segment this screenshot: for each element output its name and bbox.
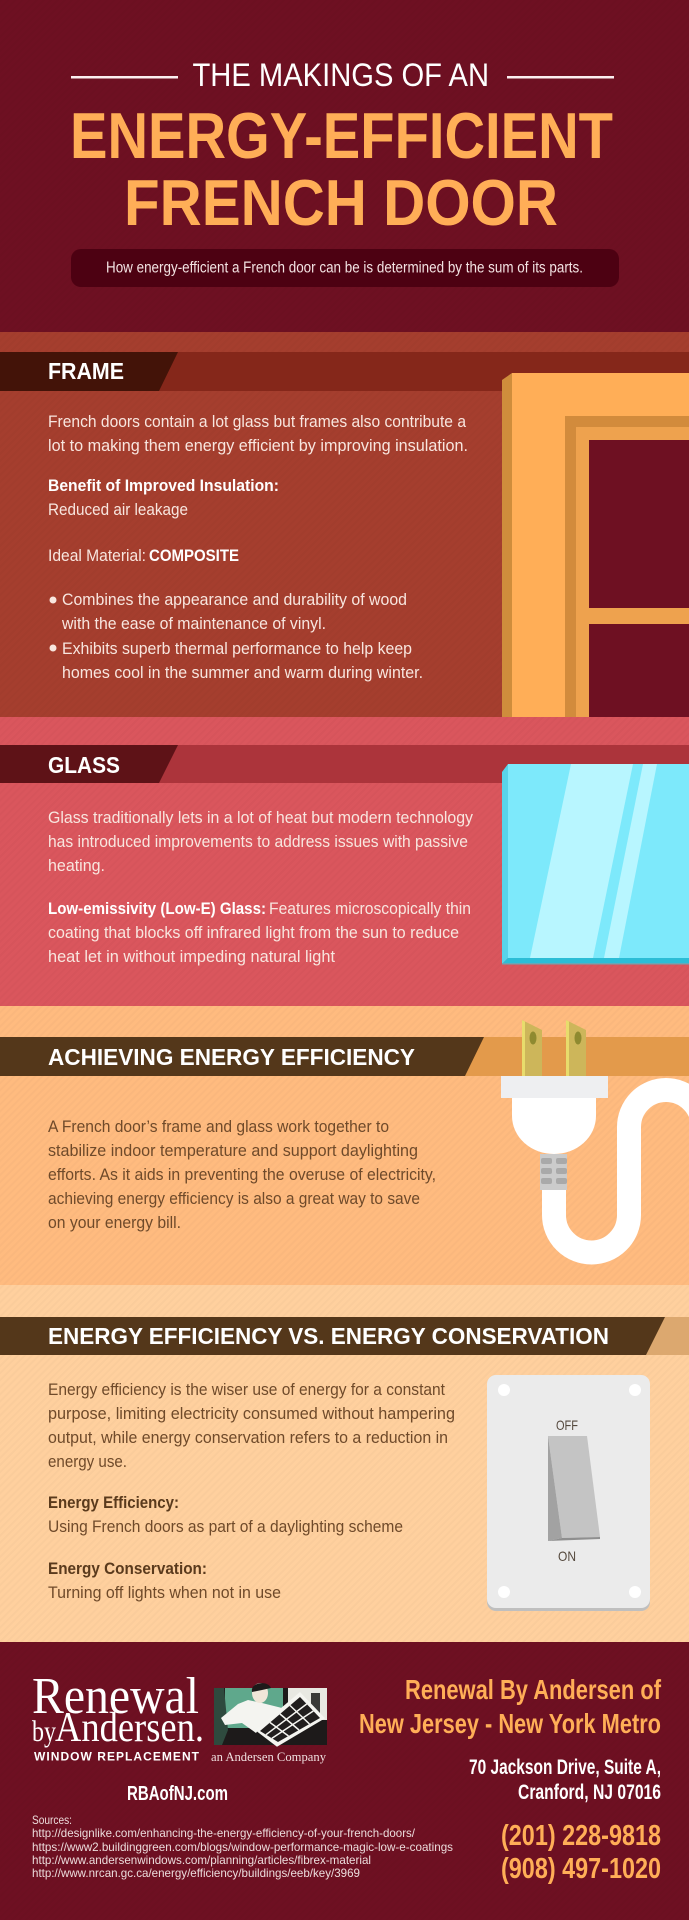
text block: achieving body: on your energy bill. [48,1214,181,1232]
heading: efficiency vs conservation: ENERGY EFFICIENCY VS. ENERGY CONSERVATION [48,1323,609,1349]
text block: low-e glass: Features microscopically thin [269,900,471,918]
text block: energy conservation example: Turning off lights when not in use [48,1584,281,1602]
heading: glass: GLASS [48,752,120,778]
text block: ideal material [48,547,239,565]
logo: renewal by andersen: WINDOW REPLACEMENT [34,1750,200,1764]
text block: frame intro [48,413,468,455]
address [469,1756,661,1804]
text block: definition: output, while energy conservation refers to a reduction in [48,1429,448,1447]
title: french door: FRENCH DOOR [124,166,558,239]
heading: achieving energy efficiency: ACHIEVING ENERGY EFFICIENCY [48,1044,415,1070]
logo: renewal by andersen: Renewal [32,1668,199,1725]
heading: frame [0,352,178,391]
text block: energy efficiency example: Energy Efficiency: [48,1494,179,1512]
heading: efficiency vs conservation [0,1317,665,1355]
icon: plug [501,1020,689,1252]
text block: definition: purpose, limiting electricity consumed without hampering [48,1405,455,1423]
text block: ideal material: COMPOSITE [149,547,239,565]
logo: renewal by andersen: Andersen. [55,1705,204,1751]
bullet list: with the ease of maintenance of vinyl. [61,615,326,633]
text block: low-e glass: coating that blocks off infrared light from the sun to reduce [48,924,459,942]
text block: achieving body: A French door’s frame and glass work together to [48,1118,389,1136]
text block: frame intro: lot to making them energy efficient by improving insulation. [48,437,468,455]
text block: sources: http://www.andersenwindows.com/planning/articles/fibrex-material [32,1853,371,1867]
heading: frame: FRAME [48,358,124,384]
text block: benefit: Reduced air leakage [48,501,188,519]
phone numbers [501,1820,661,1885]
icon: door frame [502,373,689,717]
text block: energy efficiency example [48,1494,403,1536]
text block: sources: Sources: [32,1813,72,1827]
text block: ideal material: Ideal Material: [48,547,146,565]
panel: glass [0,717,689,1006]
title: kicker: THE MAKINGS OF AN [192,57,489,93]
text block: achieving body: stabilize indoor temperature and support daylighting [48,1142,418,1160]
icon: glass pane [502,764,689,964]
icon: light switch: OFF [556,1417,578,1433]
heading: achieving energy efficiency [0,1037,484,1076]
text block: achieving body: efforts. As it aids in preventing the overuse of electricity, [48,1166,436,1184]
panel: frame [0,332,689,717]
text block: benefit: Benefit of Improved Insulation: [48,477,279,495]
text block: definition: energy use. [48,1453,127,1471]
text block: energy conservation example: Energy Conservation: [48,1560,207,1578]
icon: man carrying window [214,1683,327,1747]
website url: RBAofNJ.com [127,1783,228,1805]
heading: glass [0,745,178,783]
text block: low-e glass: Low-emissivity (Low-E) Glass: [48,900,266,918]
icon: light switch: ON [558,1548,576,1564]
text block: energy efficiency example: Using French doors as part of a daylighting scheme [48,1518,403,1536]
text block: low-e glass [48,900,471,966]
text block: sources: https://www2.buildinggreen.com/blogs/window-performance-magic-low-e-coatings [32,1840,453,1854]
bullet list [50,591,423,682]
title: energy-efficient: ENERGY-EFFICIENT [70,99,613,172]
text block: frame intro: French doors contain a lot glass but frames also contribute a [48,413,467,431]
logo: renewal by andersen: an Andersen Company [211,1749,326,1764]
text block: definition: Energy efficiency is the wiser use of energy for a constant [48,1381,445,1399]
logo: renewal by andersen: by [32,1715,56,1748]
text block: sources: http://www.nrcan.gc.ca/energy/efficiency/buildings/eeb/key/3969 [32,1866,360,1880]
panel: achieving energy efficiency [0,1006,689,1285]
subtitle pill [71,249,619,287]
text block: definition [48,1381,455,1471]
text block: benefit [48,477,279,519]
subtitle pill: How energy-efficient a French door can be is determined by the sum of its parts. [106,260,583,276]
panel: efficiency vs conservation [0,1285,689,1642]
text block: glass intro: Glass traditionally lets in a lot of heat but modern technology [48,809,474,827]
logo: renewal by andersen [32,1668,326,1764]
text block: achieving body: achieving energy efficiency is also a great way to save [48,1190,420,1208]
icon: light switch [487,1375,650,1611]
text block: low-e glass: heat let in without impeding natural light [48,948,335,966]
text block: energy conservation example [48,1560,281,1602]
text block: glass intro: heating. [48,857,105,875]
text block: sources [32,1813,453,1880]
text block: glass intro [48,809,474,875]
bullet list: homes cool in the summer and warm during winter. [62,664,423,682]
panel: footer [0,1642,689,1920]
bullet list: Exhibits superb thermal performance to help keep [62,640,412,658]
text block: glass intro: has introduced improvements to address issues with passive [48,833,468,851]
bullet list: Combines the appearance and durability of wood [62,591,407,609]
text block: sources: http://designlike.com/enhancing-the-energy-efficiency-of-your-french-doors/ [32,1826,416,1840]
company name [359,1674,662,1739]
panel: title header [0,0,689,332]
text block: achieving body [48,1118,436,1232]
